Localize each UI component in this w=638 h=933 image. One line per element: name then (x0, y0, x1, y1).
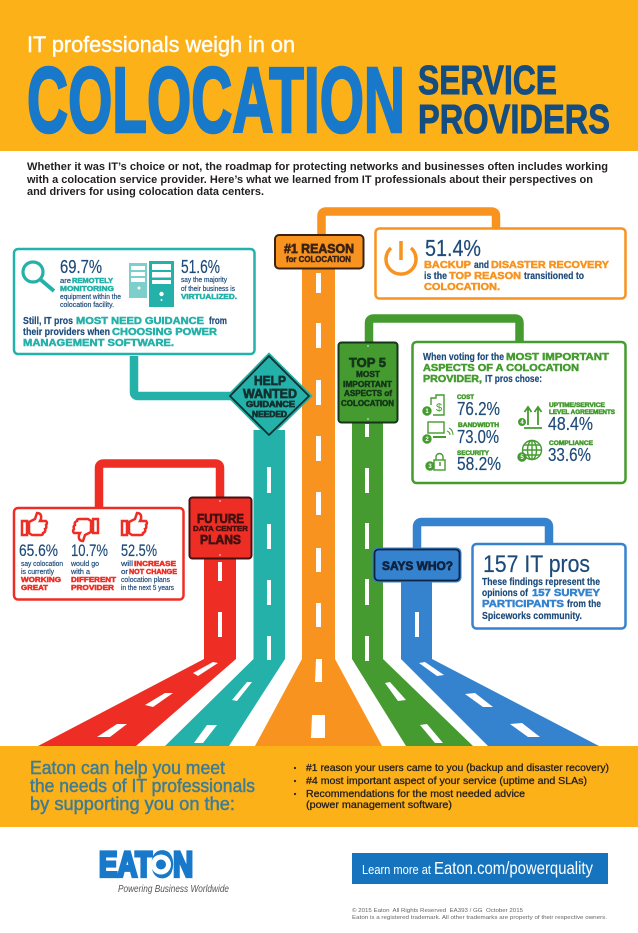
aspects statement: When voting for the (423, 352, 504, 363)
stat: cost: COST (457, 395, 474, 401)
stat: 51.6 percent: 51.6% (181, 257, 220, 277)
stat: uptime: LEVEL AGREEMENTS (549, 410, 615, 416)
top reason statement: transitioned to (524, 271, 584, 282)
stat: working great: is currently (21, 569, 54, 576)
stat: different provider (70, 541, 117, 592)
stat: uptime: UPTIME/SERVICE (549, 403, 605, 409)
stat: compliance: COMPLIANCE (549, 441, 593, 447)
stat: increase or not change: in the next 5 years (121, 585, 174, 592)
guidance statement (23, 316, 227, 349)
stat: security: SECURITY (457, 451, 489, 457)
panel: remote monitoring and guidance (14, 249, 254, 354)
icon: dollar glyph: $ (436, 402, 442, 414)
banner bullets: (power management software) (306, 799, 452, 811)
sign: says who (372, 548, 462, 582)
survey description: These findings represent the (482, 577, 600, 588)
copyright: © 2015 Eaton All Rights Reserved EA393 / GG October 2015 (352, 907, 523, 914)
banner heading: the needs of IT professionals (30, 776, 255, 796)
stat: increase or not change: or (121, 569, 129, 576)
stat: working great: 65.6% (19, 541, 58, 560)
stat: increase or not change: INCREASE (134, 561, 176, 568)
survey description: opinions of (482, 588, 529, 599)
top reason statement: and (474, 260, 489, 271)
icon: bandwidth laptop (423, 422, 453, 443)
survey description: from the (567, 599, 601, 610)
top reason statement (424, 260, 609, 293)
sign: help wanted (227, 353, 312, 438)
icon: compliance globe (518, 440, 542, 461)
intro text: with a colocation service provider. Here’s what we learned from IT professionals about their perspectives on (26, 174, 593, 186)
stat: 69.7 percent: REMOTELY (72, 278, 113, 285)
banner bullets (294, 762, 609, 811)
guidance statement: CHOOSING POWER (112, 327, 218, 338)
intro text: Whether it was IT’s choice or not, the roadmap for protecting networks and businesses often includes working (27, 161, 608, 173)
header band (0, 0, 638, 152)
stat: uptime (548, 403, 615, 434)
sign: top five (338, 342, 398, 422)
top reason statement: BACKUP (424, 260, 471, 271)
icon: thumb up two (122, 513, 147, 535)
stat: different provider: would go (70, 561, 99, 568)
stat: 51.6 percent (181, 257, 237, 301)
sign: top five: COLOCATION (341, 399, 394, 408)
sign: future data center plans: DATA CENTER (193, 524, 249, 533)
stat: working great (19, 541, 63, 592)
icon: servers (129, 261, 174, 307)
stat: increase or not change: will (120, 561, 134, 568)
stat: security: 58.2% (457, 454, 501, 474)
tagline: Powering Business Worldwide (118, 883, 229, 895)
banner bullets: Recommendations for the most needed advice (306, 788, 525, 800)
stat: bandwidth: 73.0% (457, 427, 499, 447)
copyright: Eaton is a registered trademark. All other trademarks are property of their respective owners. (352, 915, 607, 921)
icon: magnifying glass (23, 262, 54, 291)
rank numbers: 2 (425, 437, 429, 443)
guidance statement: MANAGEMENT SOFTWARE. (23, 338, 174, 349)
sign: top five: TOP 5 (349, 355, 386, 370)
icon: uptime arrows (518, 407, 542, 428)
stat: 51.4 percent: 51.4% (425, 235, 481, 261)
main title: COLOCATION (27, 48, 405, 152)
intro text (26, 161, 608, 198)
banner bullets: #4 most important aspect of your service (uptime and SLAs) (306, 775, 587, 787)
road: orange, number one reason (255, 212, 496, 746)
stat: 69.7 percent: 69.7% (60, 257, 102, 277)
guidance statement: Still, IT pros (23, 316, 73, 327)
survey description (482, 577, 601, 622)
sign: future data center plans: FUTURE (197, 511, 244, 526)
road: teal, help wanted (134, 356, 285, 746)
stat: different provider: 10.7% (71, 541, 108, 560)
stat: different provider: with a (70, 569, 90, 576)
panel: future plans (14, 508, 184, 600)
subtitle: SERVICE (418, 57, 557, 103)
stat: 69.7 percent (60, 257, 121, 309)
icon: thumb up one (22, 513, 47, 535)
guidance statement: their providers when (23, 327, 110, 338)
road: red, future plans (38, 464, 236, 746)
stat: different provider: PROVIDER (71, 585, 114, 592)
sign: help wanted: HELP (254, 373, 286, 388)
aspects statement: ASPECTS OF A COLOCATION (423, 363, 579, 374)
rank numbers: 4 (520, 420, 524, 426)
stat: working great: WORKING (21, 577, 62, 584)
stat: 69.7 percent: equipment within the (60, 294, 121, 301)
sign: help wanted: NEEDED (252, 410, 287, 419)
sign: number one reason: for COLOCATION (286, 254, 351, 264)
sign: number one reason: #1 REASON (284, 241, 354, 256)
guidance statement: from (209, 316, 227, 327)
stat: 51.6 percent: of their business is (181, 286, 235, 293)
sign: future data center plans: PLANS (200, 532, 241, 547)
banner: how Eaton can help (0, 746, 638, 827)
stat: compliance: 33.6% (548, 445, 591, 465)
icon: security lock (426, 454, 445, 470)
stat: bandwidth: BANDWIDTH (458, 423, 499, 429)
sign: help wanted: GUIDANCE (246, 400, 296, 409)
stat: 69.7 percent: colocation facility. (60, 302, 114, 309)
panel: 157 IT pros (472, 544, 626, 628)
stat: different provider: DIFFERENT (71, 577, 117, 584)
stat: cost: 76.2% (457, 399, 500, 419)
aspects statement (423, 352, 609, 385)
survey description: 157 SURVEY (532, 588, 600, 599)
road: green, top five (352, 318, 520, 746)
banner heading (30, 758, 255, 814)
subtitle (418, 57, 610, 142)
panel: most important aspects (412, 342, 626, 483)
sign: top five: IMPORTANT (343, 380, 392, 389)
icon: cost (423, 395, 444, 415)
stat: survey size: 157 IT pros (483, 551, 590, 578)
banner heading: Eaton can help you meet (30, 758, 225, 778)
aspects statement: IT pros chose: (485, 374, 542, 385)
stat: working great: GREAT (21, 585, 49, 592)
banner heading: by supporting you on the: (30, 794, 235, 814)
aspects statement: PROVIDER, (423, 374, 482, 385)
sign: top five: ASPECTS of (344, 389, 392, 398)
call to action button: Eaton.com/powerquality (434, 858, 593, 878)
stat: increase or not change (120, 541, 177, 592)
sign: future data center plans (190, 498, 252, 558)
rank numbers: 1 (425, 409, 429, 415)
top reason statement: is the (424, 271, 447, 282)
sign: says who: SAYS WHO? (382, 559, 453, 573)
rank numbers: 3 (428, 464, 432, 470)
stat: working great: say colocation (21, 561, 63, 568)
survey description: Spiceworks community. (482, 611, 582, 622)
sign: number one reason (275, 235, 364, 268)
icon: thumb down (73, 519, 98, 541)
rank numbers (425, 409, 524, 470)
call to action button: Learn more at (362, 862, 431, 877)
survey description: PARTICIPANTS (482, 599, 564, 610)
sign: top five: MOST (356, 370, 380, 379)
stat: increase or not change: NOT CHANGE (129, 569, 177, 576)
stat: 69.7 percent: are (60, 278, 71, 285)
aspects statement: MOST IMPORTANT (506, 352, 609, 363)
top reason statement: COLOCATION. (424, 282, 500, 293)
stat: 69.7 percent: MONITORING (60, 286, 115, 293)
rank numbers: 5 (520, 455, 524, 461)
sign: help wanted: WANTED (243, 386, 297, 401)
stat: 51.6 percent: say the majority (181, 277, 227, 284)
eyebrow heading: IT professionals weigh in on (27, 32, 295, 57)
stat: increase or not change: 52.5% (121, 541, 157, 560)
copyright (352, 907, 607, 921)
top reason statement: TOP REASON (449, 271, 521, 282)
stat: increase or not change: colocation plans (121, 577, 170, 584)
banner bullets: #1 reason your users came to you (backup and disaster recovery) (306, 762, 609, 774)
top reason statement: DISASTER RECOVERY (491, 260, 609, 271)
guidance statement: MOST NEED GUIDANCE (76, 316, 204, 327)
intro text: and drivers for using colocation data centers. (27, 186, 264, 198)
logo: Eaton: EATON (99, 846, 193, 884)
road: blue, says who (401, 522, 599, 746)
icon: power symbol (386, 241, 416, 274)
call to action button (352, 853, 608, 884)
stat: uptime: 48.4% (548, 414, 593, 434)
stat: 51.6 percent: VIRTUALIZED. (181, 294, 237, 301)
panel: top reason backup and disaster recovery (376, 228, 626, 298)
